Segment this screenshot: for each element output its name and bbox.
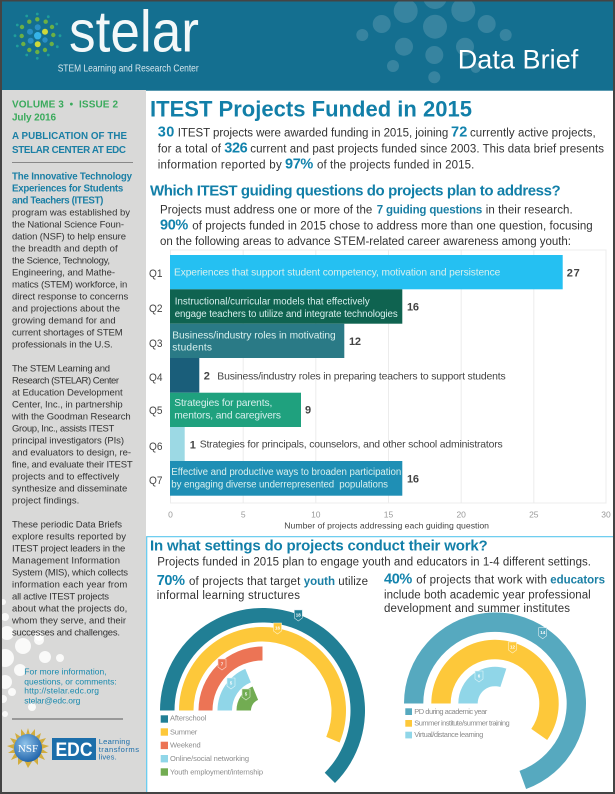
bar: Q5: 9 bbox=[305, 404, 311, 416]
bar: Q2: engage teachers to utilize and integrate technologies bbox=[175, 309, 398, 320]
guiding questions paragraph: of projects funded in 2015 chose to address more than one question, focusing bbox=[192, 220, 593, 232]
ring: afterschool bbox=[160, 608, 365, 783]
sidebar paragraph: STELAR center: Center, Inc., in partnership bbox=[12, 399, 123, 410]
x axis labels: 25 bbox=[529, 509, 539, 519]
sidebar paragraph: ITEST program: Experiences for Students bbox=[12, 183, 123, 194]
bar: Q3: students bbox=[172, 343, 212, 354]
x axis title: Number of projects addressing each guiding question bbox=[284, 520, 489, 530]
sidebar paragraph: ITEST program: and projections about the bbox=[12, 303, 120, 314]
legend: educator settings: Summer institute/summer training bbox=[414, 718, 510, 727]
sidebar paragraph: data briefs: These periodic Data Briefs bbox=[12, 519, 122, 530]
intro paragraph: ITEST projects were awarded funding in 2015, joining bbox=[178, 128, 448, 140]
guiding questions paragraph: Projects must address one or more of the bbox=[160, 204, 372, 216]
youth statement: informal learning structures bbox=[157, 590, 300, 602]
issue heading: VOLUME 3 • ISSUE 2 bbox=[12, 99, 118, 110]
ring: summer institute bbox=[431, 640, 559, 740]
publication heading: A PUBLICATION OF THE bbox=[12, 131, 127, 142]
youth statement: utilize bbox=[338, 576, 368, 588]
publication heading bbox=[12, 131, 127, 156]
bar: Q2 bbox=[149, 289, 419, 324]
icon: EDC logo: Learning bbox=[99, 737, 130, 746]
bar: Q1: Q1 bbox=[149, 268, 162, 280]
sidebar paragraph: STELAR center: Group, Inc., assists ITEST bbox=[12, 423, 114, 434]
settings intro: Projects funded in 2015 plan to engage youth and educators in 1-4 different settings. bbox=[157, 557, 591, 569]
guiding questions paragraph: 90% bbox=[160, 217, 188, 233]
sidebar paragraph: data briefs: successes and challenges. bbox=[12, 627, 120, 638]
sidebar paragraph: STELAR center: principal investigators (PIs) bbox=[12, 435, 124, 446]
bar: Q1: Experiences that support student competency, motivation and persistence bbox=[174, 268, 501, 279]
sidebar paragraph: ITEST program: growing demand for and bbox=[12, 315, 116, 326]
bar: Q6: Q6 bbox=[149, 441, 162, 453]
intro paragraph: 97% bbox=[285, 157, 313, 173]
x axis labels: 0 bbox=[168, 509, 173, 519]
x axis labels: 20 bbox=[456, 509, 466, 519]
icon: NSF logo bbox=[7, 728, 49, 768]
legend: youth settings: Online/social networking bbox=[170, 754, 249, 763]
ring: virtual learning: 6 bbox=[478, 674, 481, 678]
sidebar paragraph: ITEST program bbox=[12, 171, 133, 350]
x axis labels: 15 bbox=[384, 509, 393, 519]
intro paragraph bbox=[158, 125, 604, 173]
legend: educator settings bbox=[405, 707, 510, 739]
issue heading bbox=[12, 99, 118, 124]
radial chart: youth settings bbox=[160, 608, 365, 783]
sidebar paragraph: ITEST program: the Science, Technology, bbox=[12, 255, 110, 266]
header banner bbox=[2, 0, 613, 91]
bar: Q6 bbox=[149, 427, 503, 461]
legend: youth settings bbox=[161, 714, 263, 776]
legend: youth settings: Summer bbox=[170, 727, 198, 736]
sidebar paragraph: STELAR center: and evaluators to design, re- bbox=[12, 447, 131, 458]
icon: EDC logo bbox=[52, 737, 139, 762]
contact information: For more information, bbox=[24, 667, 107, 677]
sidebar paragraph: data briefs: information each year from bbox=[12, 579, 127, 590]
bar: Q2: Q2 bbox=[149, 303, 162, 315]
header bubble decoration bbox=[356, 0, 512, 83]
bar: Q3: Q3 bbox=[149, 338, 162, 350]
youth statement: of projects that target bbox=[189, 576, 301, 588]
guiding questions paragraph: on the following areas to advance STEM-related career awareness among youth: bbox=[160, 236, 571, 248]
sidebar paragraph: ITEST program: matics (STEM) workforce, in bbox=[12, 279, 127, 290]
x axis labels: 10 bbox=[311, 509, 321, 519]
legend: youth settings: Youth employment/internship bbox=[170, 767, 263, 776]
ring: youth employment bbox=[236, 686, 258, 710]
bar: Q5: Q5 bbox=[149, 405, 162, 417]
sidebar paragraph: STELAR center: at Education Development bbox=[12, 387, 123, 398]
legend: educator settings: PD during academic year bbox=[414, 707, 488, 716]
ring: summer: 16 bbox=[275, 626, 280, 630]
panel: settings bbox=[147, 537, 613, 792]
sidebar paragraph: data briefs: about what the projects do, bbox=[12, 603, 127, 614]
sidebar paragraph: ITEST program: the National Science Foun- bbox=[12, 219, 124, 230]
heading: guiding questions: Which ITEST guiding questions do projects plan to address? bbox=[150, 183, 561, 200]
icon: stelar logo burst bbox=[14, 13, 61, 60]
issue heading: July 2016 bbox=[12, 113, 56, 124]
sidebar paragraph: STELAR center: The STEM Learning and bbox=[12, 363, 110, 374]
radial chart: educator settings bbox=[404, 612, 586, 789]
sidebar paragraph: ITEST program: direct response to concerns bbox=[12, 291, 129, 302]
logo wordmark: stelar bbox=[69, 0, 199, 65]
bar: Q6: Strategies for principals, counselors, and other school administrators bbox=[200, 440, 503, 451]
x axis labels: 5 bbox=[241, 509, 246, 519]
intro paragraph: 326 bbox=[224, 141, 248, 157]
bar: Q7 bbox=[149, 461, 419, 496]
ring: weekend bbox=[198, 646, 262, 710]
bar: Q5 bbox=[149, 393, 311, 427]
bar: Q1: 27 bbox=[567, 268, 580, 280]
contact information: http://stelar.edc.org bbox=[24, 686, 99, 696]
title: ITEST Projects Funded in 2015 bbox=[150, 97, 472, 122]
icon: NSF logo: NSF bbox=[18, 743, 38, 755]
sidebar paragraph: data briefs: System (MIS), which collects bbox=[12, 567, 128, 578]
ring: virtual learning bbox=[458, 667, 506, 704]
intro paragraph: for a total of bbox=[158, 144, 222, 156]
contact information: stelar@edc.org bbox=[24, 695, 81, 705]
icon: EDC logo: transforms bbox=[99, 745, 139, 754]
intro paragraph: information reported by bbox=[158, 160, 282, 172]
guiding questions paragraph bbox=[160, 204, 593, 248]
bar: Q6: 1 bbox=[190, 439, 196, 451]
sidebar paragraph: ITEST program: current shortages of STEM bbox=[12, 327, 123, 338]
ring: afterschool: 18 bbox=[296, 612, 301, 618]
bar: Q5: Strategies for parents, bbox=[174, 398, 272, 409]
intro paragraph: 72 bbox=[451, 125, 467, 141]
ring: weekend: 7 bbox=[221, 662, 224, 666]
sidebar paragraph: data briefs: ITEST project leaders in the bbox=[12, 543, 125, 554]
sidebar paragraph: STELAR center bbox=[11, 363, 133, 506]
youth statement: youth bbox=[304, 576, 335, 588]
sidebar paragraph: STELAR center: Research (STELAR) Center bbox=[12, 375, 119, 386]
legend: educator settings: Virtual/distance learning bbox=[414, 730, 483, 739]
youth statement bbox=[157, 573, 368, 602]
icon: EDC logo: lives. bbox=[99, 753, 117, 762]
sidebar paragraph: ITEST program: and Teachers (ITEST) bbox=[12, 195, 103, 206]
guiding questions paragraph: in their research. bbox=[486, 204, 573, 216]
educators statement: 40% bbox=[384, 572, 412, 588]
sidebar paragraph: data briefs: all active ITEST projects bbox=[12, 591, 109, 602]
sidebar paragraph: ITEST program: The Innovative Technology bbox=[12, 171, 133, 182]
sidebar paragraph: data briefs: explore results reported by bbox=[12, 531, 126, 542]
bar: Q7: Effective and productive ways to broaden participation bbox=[171, 467, 401, 478]
guiding questions paragraph: 7 guiding questions bbox=[377, 204, 482, 216]
sidebar paragraph: STELAR center: fine, and evaluate their ITEST bbox=[12, 459, 133, 470]
logo tagline: STEM Learning and Research Center bbox=[58, 63, 199, 75]
bar: Q4: Business/industry roles in preparing teachers to support students bbox=[217, 371, 506, 382]
sidebar paragraph: ITEST program: the breadth and depth of bbox=[12, 243, 118, 254]
chart grid bbox=[170, 250, 606, 503]
educators statement: development and summer institutes bbox=[384, 603, 570, 615]
legend: youth settings: Weekend bbox=[170, 741, 201, 750]
sidebar paragraph: ITEST program: program was established by bbox=[12, 207, 130, 218]
bar: Q2: 16 bbox=[407, 302, 419, 314]
intro paragraph: of the projects funded in 2015. bbox=[317, 160, 474, 172]
sidebar paragraph: data briefs bbox=[11, 519, 128, 638]
ring: PD during academic year bbox=[404, 612, 586, 789]
sidebar bubble decoration bbox=[0, 599, 64, 717]
ring: youth employment: 5 bbox=[245, 692, 248, 696]
educators statement: of projects that work with bbox=[416, 575, 547, 587]
legend: youth settings: Afterschool bbox=[170, 714, 207, 723]
educators statement: educators bbox=[550, 575, 605, 587]
ring: summer bbox=[179, 623, 346, 742]
bar: Q4 bbox=[149, 358, 506, 393]
ring: online bbox=[218, 669, 251, 710]
publication heading: STELAR CENTER AT EDC bbox=[12, 145, 126, 156]
sidebar paragraph: STELAR center: with the Goodman Research bbox=[11, 411, 131, 422]
contact information bbox=[24, 667, 117, 705]
sidebar paragraph: ITEST program: Engineering, and Mathe- bbox=[12, 267, 115, 278]
sidebar paragraph: STELAR center: projects and to effectively bbox=[12, 471, 120, 482]
ring: online: 5 bbox=[230, 680, 233, 686]
sidebar paragraph: data briefs: Management Information bbox=[12, 555, 120, 566]
bar: Q4: 2 bbox=[204, 370, 210, 382]
intro paragraph: currently active projects, bbox=[470, 128, 596, 140]
sidebar paragraph: ITEST program: professionals in the U.S. bbox=[12, 339, 113, 350]
educators statement: include both academic year professional bbox=[384, 589, 591, 601]
youth statement: 70% bbox=[157, 573, 185, 589]
ring: summer institute: 12 bbox=[510, 644, 515, 650]
bar: Q3: 12 bbox=[349, 336, 361, 348]
icon: EDC logo: EDC bbox=[56, 740, 93, 761]
bar chart: guiding questions bbox=[149, 250, 611, 530]
bar: Q7: by engaging diverse underrepresented populations bbox=[171, 480, 388, 491]
heading: settings: In what settings do projects conduct their work? bbox=[150, 538, 488, 555]
contact information: questions, or comments: bbox=[24, 677, 117, 687]
intro paragraph: current and past projects funded since 2003. This data brief presents bbox=[250, 144, 604, 156]
sidebar bbox=[0, 90, 146, 792]
data brief label: Data Brief bbox=[458, 45, 579, 75]
bar: Q3 bbox=[149, 324, 361, 358]
bar: Q3: Business/industry roles in motivating bbox=[172, 330, 336, 341]
bar: Q2: Instructional/curricular models that effectively bbox=[175, 296, 370, 307]
bar: Q5: mentors, and caregivers bbox=[174, 410, 281, 421]
ring: PD during academic year: 14 bbox=[540, 630, 546, 635]
x axis labels: 30 bbox=[601, 509, 611, 519]
sidebar paragraph: STELAR center: project findings. bbox=[12, 495, 79, 506]
bar: Q7: Q7 bbox=[149, 475, 162, 487]
bar: Q4: Q4 bbox=[149, 372, 162, 384]
educators statement bbox=[384, 572, 605, 615]
bar: Q1 bbox=[149, 255, 580, 289]
sidebar paragraph: data briefs: whom they serve, and their bbox=[11, 615, 126, 626]
bar: Q7: 16 bbox=[407, 474, 419, 486]
x axis labels bbox=[168, 509, 611, 519]
sidebar paragraph: STELAR center: synthesize and disseminate bbox=[12, 483, 127, 494]
intro paragraph: 30 bbox=[158, 125, 174, 141]
sidebar paragraph: ITEST program: dation (NSF) to help ensure bbox=[12, 231, 126, 242]
